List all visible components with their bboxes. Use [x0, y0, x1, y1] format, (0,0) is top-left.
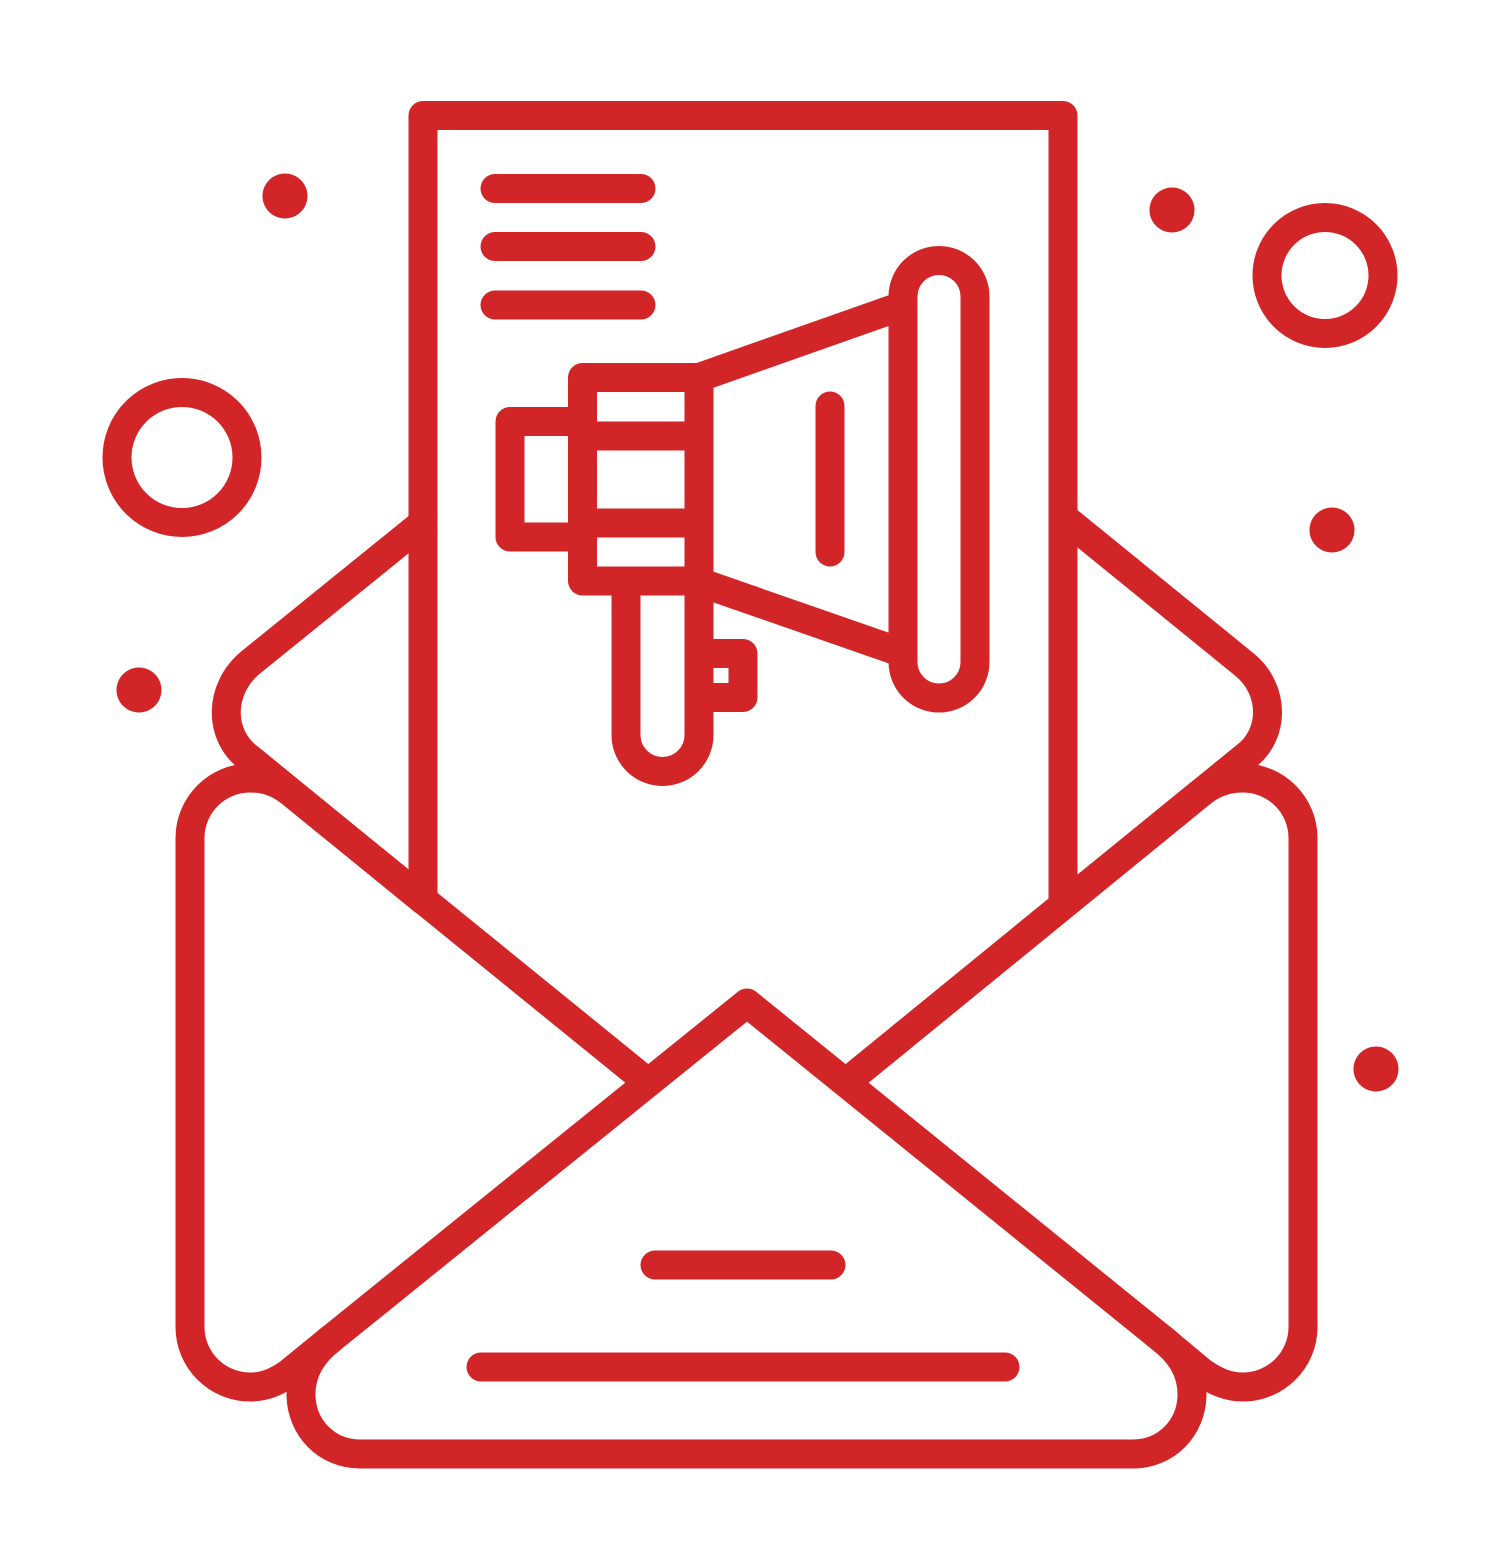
- envelope front text lines: [481, 1265, 1005, 1367]
- megaphone cone mark: [816, 406, 844, 552]
- megaphone trigger: [699, 654, 743, 698]
- megaphone grip: [626, 581, 699, 772]
- megaphone handle block: [582, 378, 699, 581]
- decoration: ring right: [1267, 218, 1383, 334]
- decoration: dots: [116, 174, 1398, 1092]
- icon: envelope: [190, 517, 1303, 1454]
- megaphone bell rim: [903, 260, 975, 698]
- envelope front flap: [301, 1003, 1192, 1454]
- megaphone cone: [699, 306, 903, 653]
- megaphone rear box: [510, 422, 582, 537]
- envelope open flap left: [226, 523, 423, 900]
- decoration: ring left: [117, 392, 247, 522]
- text lines on letter: [495, 188, 641, 305]
- envelope back right: [849, 778, 1303, 1387]
- icon: letter sheet: [423, 116, 1063, 905]
- icon: megaphone: [510, 260, 975, 772]
- envelope back left: [190, 778, 645, 1387]
- envelope open flap right: [1063, 517, 1268, 905]
